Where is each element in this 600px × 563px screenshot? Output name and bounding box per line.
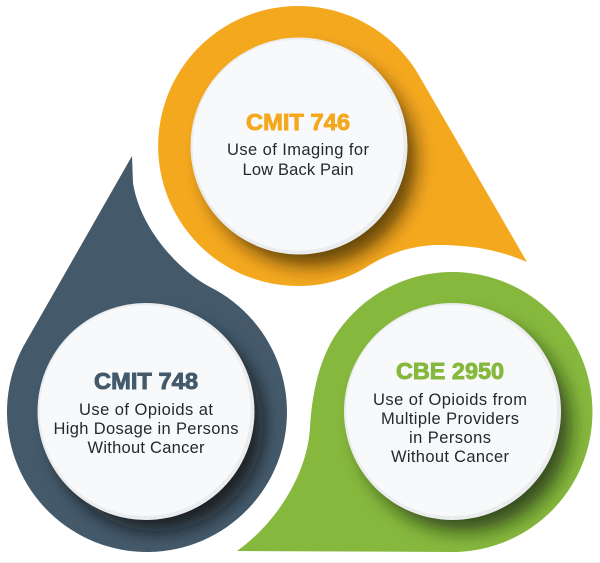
description: opioids from multiple providers: Multiple Providers (381, 410, 519, 428)
heading: CMIT 746: CMIT 746 (246, 109, 350, 135)
orange drop shape (158, 6, 527, 286)
description: opioids at high dosage: High Dosage in Persons (54, 420, 238, 438)
white circle (38, 303, 254, 520)
description: opioids from multiple providers: Without Cancer (391, 448, 510, 466)
description: imaging for low back pain: Low Back Pain (242, 161, 354, 179)
description: opioids at high dosage: Use of Opioids at (79, 401, 213, 419)
description: opioids at high dosage (54, 401, 238, 457)
description: imaging for low back pain: Use of Imaging for (227, 141, 370, 159)
description: imaging for low back pain (227, 141, 370, 179)
dark drop shadow (51, 319, 263, 531)
white circle (344, 303, 561, 520)
panel: CMIT 746 (158, 6, 527, 286)
heading: CMIT 748: CMIT 748 (94, 368, 198, 394)
description: opioids at high dosage: Without Cancer (88, 439, 205, 457)
green drop shadow (358, 319, 570, 531)
description: opioids from multiple providers: Use of Opioids from (373, 391, 527, 409)
description: opioids from multiple providers: in Persons (409, 429, 491, 447)
heading: CBE 2950: CBE 2950 (396, 358, 504, 384)
orange drop shadow (204, 54, 416, 266)
dark drop shape (7, 156, 287, 552)
panel: CBE 2950 (237, 272, 592, 552)
green drop shape (237, 272, 592, 552)
description: opioids from multiple providers (373, 391, 527, 466)
white circle (190, 38, 408, 254)
panel: CMIT 748 (7, 156, 287, 552)
